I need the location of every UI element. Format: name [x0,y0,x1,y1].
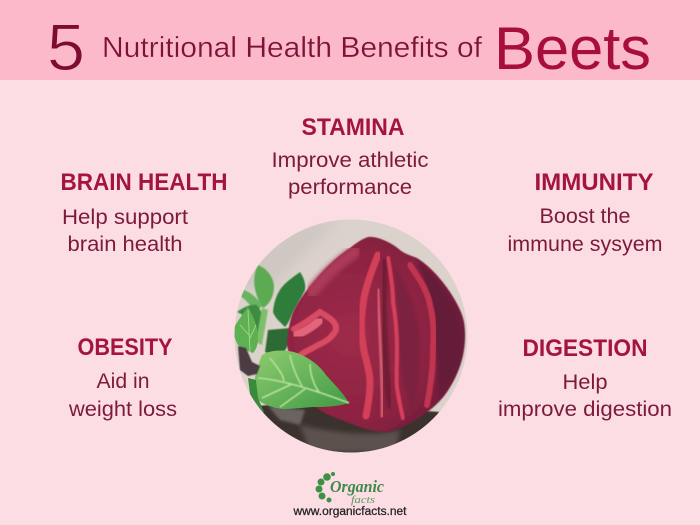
small leaf [234,307,258,353]
title number 5: 5 [47,10,85,84]
left dent highlight [294,312,336,356]
benefit: immunity: immune sysyem [508,232,662,256]
benefit: brain health: Help support [62,205,188,229]
benefit: immunity [508,169,662,256]
benefit: stamina: STAMINA [302,114,404,141]
benefit: digestion [498,335,672,421]
benefit: brain health [60,169,228,256]
logo: Organic Facts [292,472,407,518]
benefit: brain health: brain health [68,232,182,256]
stem [248,378,264,412]
beet photo circle [234,219,468,456]
back basil leaves [237,265,305,358]
purple flower [238,346,260,376]
logo: Organic Facts: facts [351,494,375,506]
benefit: stamina [272,114,429,199]
right dark lobe [417,262,463,398]
benefit: digestion: improve digestion [498,397,672,421]
benefit: digestion: Help [562,370,608,394]
title word Beets: Beets [494,15,651,82]
benefit: obesity: weight loss [68,397,177,421]
title banner [0,0,700,84]
beet shading and streaks [294,252,463,418]
benefit: stamina: performance [288,175,412,199]
benefit: immunity: IMMUNITY [534,169,654,196]
benefit: obesity: Aid in [96,369,150,393]
logo wordmark: Organic [330,477,384,496]
benefit: brain health: BRAIN HEALTH [60,169,228,196]
benefit: obesity: OBESITY [78,334,172,361]
front basil leaf [234,307,349,412]
logo leaf wreath [316,472,335,502]
benefit: immunity: Boost the [540,204,630,228]
title text: Nutritional Health Benefits of [102,32,483,64]
soil [258,404,440,452]
benefit: stamina: Improve athletic [272,148,429,172]
benefit: digestion: DIGESTION [522,335,648,362]
beet body [287,237,465,432]
benefit: obesity [68,334,177,421]
website url: www.organicfacts.net [292,506,407,518]
